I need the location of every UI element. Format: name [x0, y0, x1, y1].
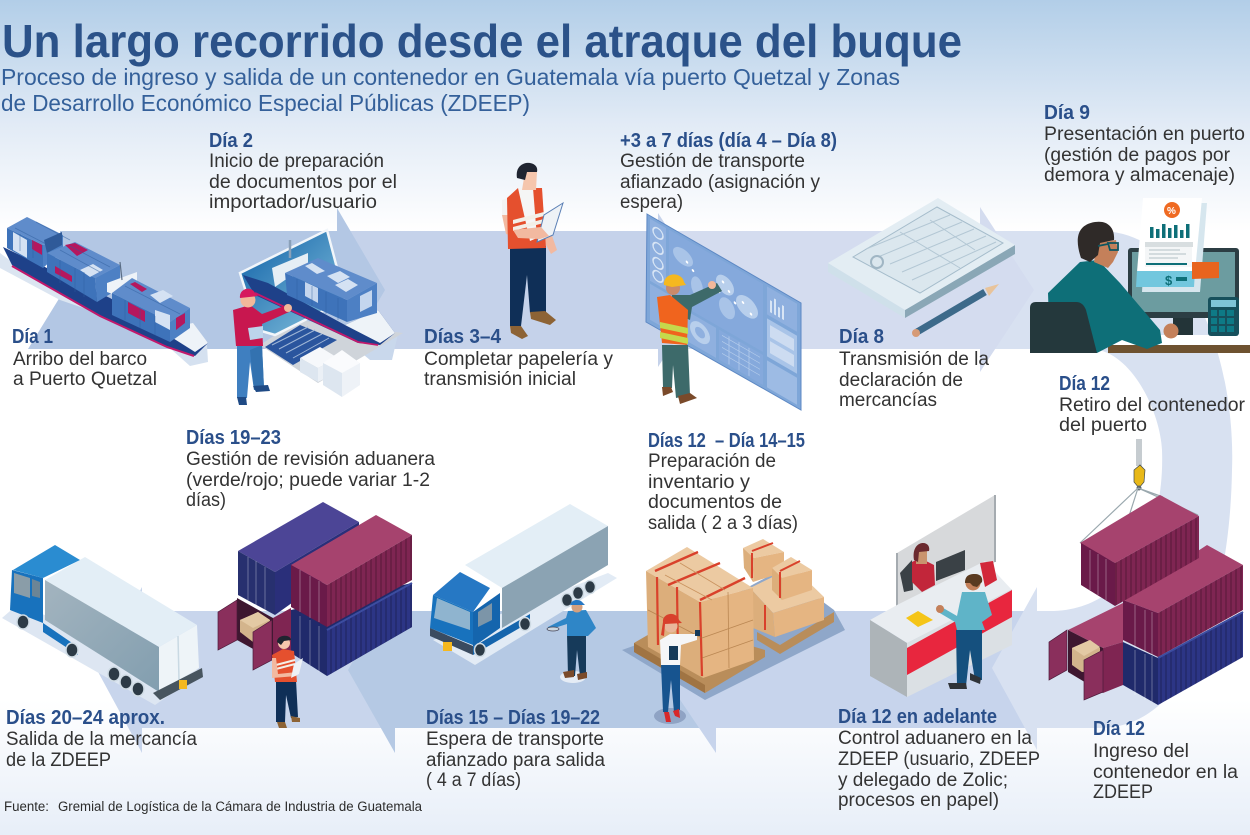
- text: days 19-23: días): [186, 490, 226, 511]
- text: day 8: Transmisión de la: [839, 349, 989, 370]
- text: day 12 onwards: procesos en papel): [838, 790, 999, 811]
- illustration: containers and worker, days 19-23: [218, 502, 412, 728]
- text: day 12 ZDEEP entry: ZDEEP: [1093, 782, 1153, 803]
- text: day 9: demora y almacenaje): [1044, 165, 1235, 186]
- open container with cargo: [1068, 603, 1123, 648]
- text: day 2: Día 2: [209, 130, 253, 152]
- text: day 12 container pickup: [1059, 373, 1246, 436]
- text: day 8: [839, 326, 989, 411]
- text: day 9: (gestión de pagos por: [1044, 145, 1231, 166]
- illustration: digital dashboard and worker, +3 to 7 days: [646, 214, 801, 410]
- text: days 15-22: afianzado para salida: [426, 750, 605, 771]
- main pallet: [634, 547, 765, 693]
- text: day 9: Presentación en puerto: [1044, 124, 1245, 145]
- figure: man in blue cap: [547, 600, 596, 683]
- subtitle: Proceso de ingreso y salida de un contenedor en Guatemala vía puerto Quetzal y Zonas: [1, 64, 900, 90]
- text: days 19-23: (verde/rojo; puede variar 1-2: [186, 470, 430, 491]
- lower navy container: [1123, 642, 1158, 705]
- text: days 3-4: Días 3–4: [424, 326, 502, 348]
- text: days 3-4: Completar papelería y: [424, 349, 613, 370]
- figure: worker with vest: [272, 636, 303, 728]
- text: day 9: [1044, 102, 1245, 186]
- illustration: container ship, day 1: [0, 217, 208, 366]
- subtitle: de Desarrollo Económico Especial Públicas (ZDEEP): [1, 90, 530, 116]
- open container with cargo: [237, 598, 273, 660]
- illustration: blue truck and man, days 15-22: [430, 504, 617, 683]
- text: day 2: de documentos por el: [209, 172, 397, 193]
- text: day 12 to day 14-15: salida ( 2 a 3 días): [648, 513, 798, 534]
- text: days 3-4: [424, 326, 613, 390]
- text: day 8: Día 8: [839, 326, 884, 348]
- text: days 20-24: Salida de la mercancía: [6, 729, 197, 750]
- text: day 1: Día 1: [12, 326, 53, 348]
- illustration: laptop, ship and worker, day 2: [233, 230, 403, 405]
- text: day 12 to day 14-15: Días 12 – Día 14–15: [648, 430, 805, 452]
- figure: man in red: [233, 289, 292, 405]
- figure: woman with scanner: [654, 614, 700, 724]
- illustration: man at computer, day 9: [1030, 198, 1250, 353]
- text: day 12 onwards: [838, 706, 1040, 811]
- illustration: service counter, day 12 onwards: [870, 495, 1012, 697]
- text: +3 to 7 days: afianzado (asignación y: [620, 172, 820, 193]
- text: days 19-23: Días 19–23: [186, 427, 281, 449]
- right pallet: [743, 539, 834, 654]
- figure: worker with helmet: [657, 274, 722, 404]
- text: days 15-22: ( 4 a 7 días): [426, 770, 521, 791]
- text: day 1: a Puerto Quetzal: [13, 369, 157, 390]
- text: days 15-22: [426, 707, 605, 791]
- text: day 2: Inicio de preparación: [209, 151, 384, 172]
- illustration: document stack and pencil, day 8: [828, 198, 1015, 337]
- text: days 15-22: Espera de transporte: [426, 729, 604, 750]
- text: day 12 container pickup: Retiro del contenedor: [1059, 395, 1246, 416]
- text: day 12 ZDEEP entry: contenedor en la: [1093, 762, 1238, 783]
- text: day 12 to day 14-15: documentos de: [648, 492, 782, 513]
- text: days 15-22: Días 15 – Días 19–22: [426, 707, 600, 729]
- text: +3 to 7 days: espera): [620, 192, 683, 213]
- text: +3 to 7 days: +3 a 7 días (día 4 – Día 8): [620, 130, 837, 152]
- illustration: worker with tablet, days 3-4: [502, 163, 563, 339]
- text: days 20-24: de la ZDEEP: [6, 750, 111, 771]
- text: day 12 ZDEEP entry: Ingreso del: [1093, 741, 1189, 762]
- text: days 20-24: [6, 707, 197, 771]
- text: day 12 to day 14-15: [648, 430, 805, 534]
- text: +3 to 7 days: Gestión de transporte: [620, 151, 805, 172]
- title: Un largo recorrido desde el atraque del buque: [2, 15, 962, 67]
- text: days 19-23: Gestión de revisión aduanera: [186, 449, 435, 470]
- text: day 12 ZDEEP entry: [1093, 718, 1238, 803]
- bottom timeline arrow band: [97, 587, 1100, 753]
- source note: Gremial de Logística de la Cámara de Industria de Guatemala: [58, 799, 422, 814]
- hanging container: [1080, 495, 1199, 563]
- text: day 12 container pickup: del puerto: [1059, 415, 1147, 436]
- text: day 12 onwards: Día 12 en adelante: [838, 706, 997, 728]
- source note: Fuente:: [4, 799, 49, 814]
- text: day 1: Arribo del barco: [13, 349, 147, 370]
- figure: customer: [936, 574, 992, 689]
- top timeline arrow band: [28, 207, 1232, 728]
- crane hook and slings: [1080, 439, 1198, 563]
- text: day 9: Día 9: [1044, 102, 1090, 124]
- text: day 12 onwards: y delegado de Zolic;: [838, 770, 1008, 791]
- text: day 12 onwards: Control aduanero en la: [838, 728, 1032, 749]
- upper right container: [1123, 545, 1243, 613]
- text: days 20-24: Días 20–24 aprox.: [6, 707, 165, 729]
- text: day 12 ZDEEP entry: Día 12: [1093, 718, 1145, 740]
- text: day 2: importador/usuario: [209, 192, 377, 213]
- text: day 1: [12, 326, 157, 390]
- illustration: pallets of boxes, days 12-15: [622, 539, 845, 724]
- text: day 12 container pickup: Día 12: [1059, 373, 1110, 395]
- illustration: man at computer, day 9: $: [1165, 273, 1173, 288]
- text: day 12 to day 14-15: Preparación de: [648, 451, 776, 472]
- text: day 8: mercancías: [839, 390, 937, 411]
- text: day 8: declaración de: [839, 370, 963, 391]
- illustration: containers on crane hook, day 12: [1049, 439, 1243, 705]
- text: +3 to 7 days: [620, 130, 837, 213]
- text: day 2: [209, 130, 397, 213]
- text: day 12 onwards: ZDEEP (usuario, ZDEEP: [838, 749, 1040, 770]
- text: days 3-4: transmisión inicial: [424, 369, 576, 390]
- text: days 19-23: [186, 427, 435, 511]
- illustration: man at computer, day 9: %: [1167, 206, 1176, 217]
- subtitle: [1, 64, 900, 116]
- illustration: white truck, days 20-24: [2, 545, 203, 705]
- text: day 12 to day 14-15: inventario y: [648, 472, 751, 493]
